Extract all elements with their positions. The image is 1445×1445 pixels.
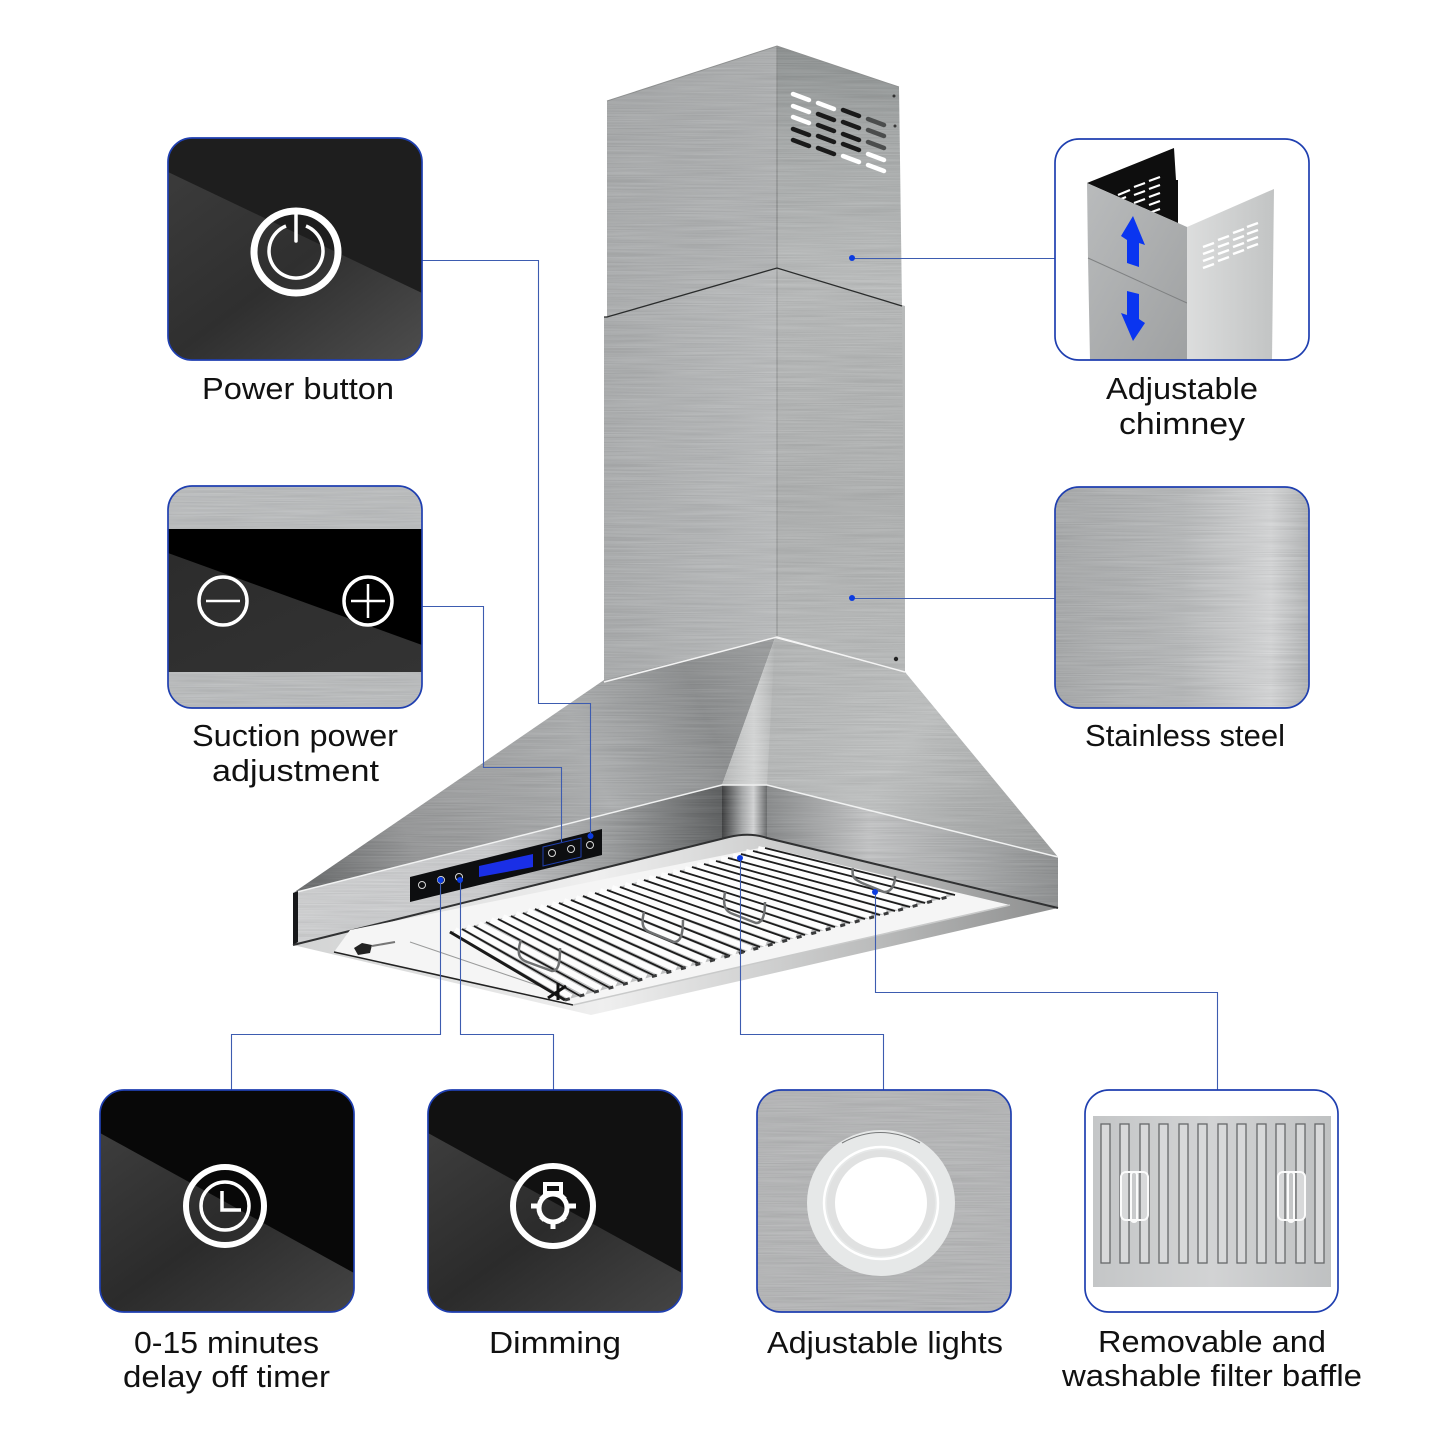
label: delay off timer: 0-15 minutes bbox=[134, 1325, 319, 1360]
panel: suction power adjustment bbox=[168, 486, 422, 708]
label: delay off timer: delay off timer bbox=[123, 1359, 330, 1394]
label: adjustable chimney bbox=[1106, 371, 1258, 441]
panel: delay off timer bbox=[100, 1090, 354, 1312]
upper chimney bbox=[607, 46, 902, 317]
filter handles bbox=[1121, 1172, 1305, 1222]
label: removable filter baffle bbox=[1061, 1324, 1362, 1393]
LCD display bbox=[479, 854, 533, 877]
connector: power button bbox=[422, 260, 590, 836]
hood edges bbox=[293, 268, 1058, 945]
label: removable filter baffle: washable filter baffle bbox=[1061, 1358, 1362, 1393]
lower chimney bbox=[604, 268, 905, 682]
icon: round light bbox=[807, 1130, 955, 1276]
panel: removable filter baffle bbox=[1085, 1090, 1338, 1312]
label: removable filter baffle: Removable and bbox=[1098, 1324, 1326, 1359]
underside rim bbox=[293, 835, 1058, 1015]
icon: clock bbox=[186, 1167, 264, 1245]
label: suction power adjustment: Suction power bbox=[192, 718, 398, 753]
panel: adjustable lights bbox=[757, 1090, 1011, 1312]
icon: minus bbox=[199, 577, 247, 625]
label: adjustable lights: Adjustable lights bbox=[767, 1325, 1003, 1360]
label: dimming: Dimming bbox=[489, 1325, 621, 1360]
connector: dimming bbox=[460, 880, 554, 1090]
label: stainless steel: Stainless steel bbox=[1085, 718, 1285, 753]
connector: suction adjustment bbox=[422, 606, 562, 842]
icon: dimming gear bbox=[513, 1166, 593, 1246]
chimney right face bbox=[1187, 189, 1274, 360]
connector: adjustable lights bbox=[740, 858, 884, 1090]
icon: plus bbox=[344, 577, 392, 625]
control panel bbox=[410, 829, 602, 902]
label: delay off timer bbox=[123, 1325, 330, 1394]
arrow down bbox=[1121, 291, 1145, 341]
label: power button: Power button bbox=[202, 371, 394, 406]
canopy pyramid bbox=[293, 638, 1058, 893]
light fixture clamp bbox=[354, 942, 566, 1000]
panel: adjustable chimney bbox=[1055, 139, 1309, 360]
panel: stainless steel bbox=[1055, 487, 1309, 708]
filter plate bbox=[1093, 1116, 1331, 1287]
label: adjustable chimney: Adjustable bbox=[1106, 371, 1258, 406]
range hood product bbox=[293, 46, 1058, 1015]
chimney back plate bbox=[1087, 148, 1180, 224]
front band bbox=[293, 785, 1058, 945]
label: suction power adjustment bbox=[192, 718, 398, 788]
chimney vent slots bbox=[793, 94, 884, 171]
panel: dimming bbox=[428, 1090, 682, 1312]
connector: delay timer bbox=[232, 880, 440, 1090]
icon: power bbox=[254, 211, 338, 293]
connector: filter baffle bbox=[876, 892, 1218, 1090]
baffle filter bbox=[450, 848, 955, 1000]
filter handles bbox=[519, 868, 895, 971]
connector: adjustable chimney bbox=[852, 258, 1055, 260]
label: suction power adjustment: adjustment bbox=[212, 753, 379, 788]
connector: stainless steel bbox=[852, 598, 1055, 600]
brushed texture on hood bbox=[293, 46, 1058, 946]
panel: power button bbox=[168, 138, 422, 360]
chimney left face bbox=[1087, 183, 1187, 360]
arrow up bbox=[1121, 216, 1145, 267]
filter slots bbox=[1101, 1124, 1324, 1263]
label: adjustable chimney: chimney bbox=[1119, 406, 1246, 441]
connector dots bbox=[438, 255, 878, 895]
